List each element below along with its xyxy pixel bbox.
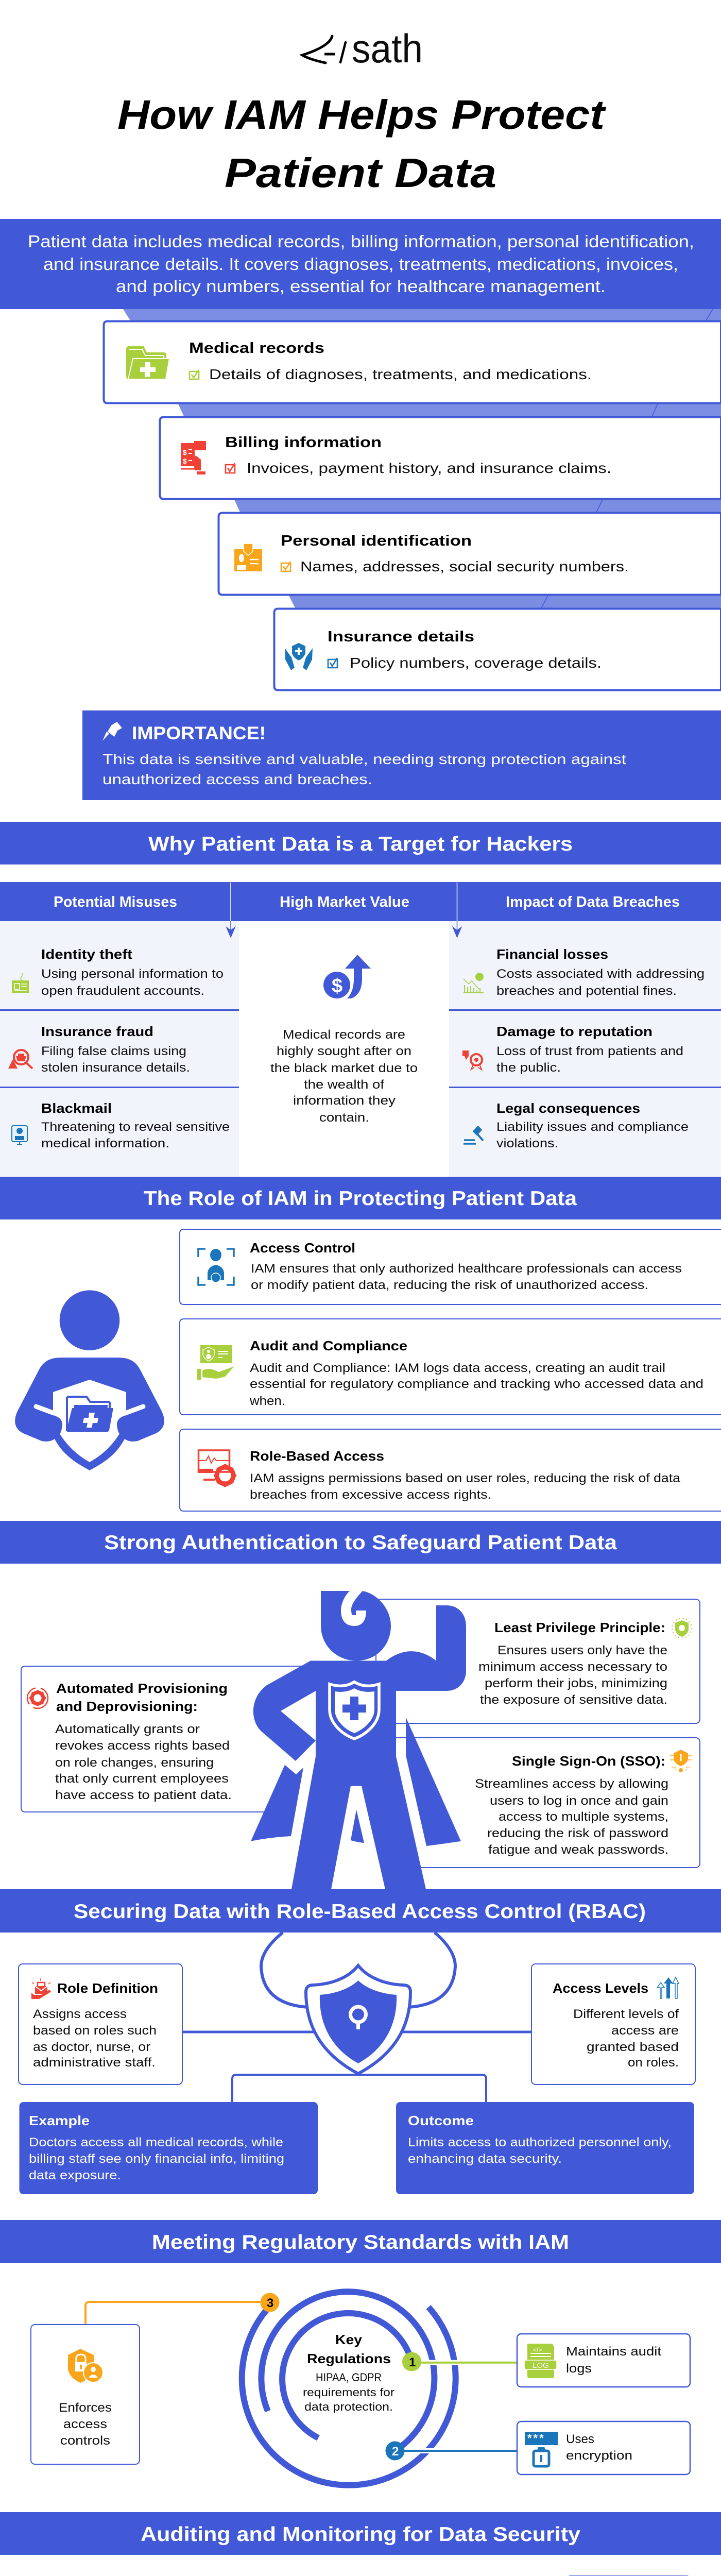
icon: billing invoice hand <box>181 441 206 474</box>
text: audit and compliance <box>249 1338 703 1408</box>
panel: automated provisioning <box>21 1666 314 1812</box>
text: damage to reputation: Damage to reputation <box>496 1024 653 1039</box>
text: automated provisioning <box>55 1681 232 1802</box>
text: access levels: granted based <box>587 2040 679 2054</box>
badge 2 <box>385 2441 405 2461</box>
text: identity theft: Identity theft <box>41 946 132 962</box>
text: automated provisioning: on role changes, ensuring <box>55 1756 214 1770</box>
text: least privilege: Least Privilege Principle: <box>494 1620 665 1635</box>
text: financial losses <box>496 946 705 998</box>
text: single sign-on: access to multiple systems, <box>499 1810 668 1824</box>
icon: orange checkbox <box>281 562 290 571</box>
text: damage to reputation: the public. <box>496 1061 561 1075</box>
heading: RBAC <box>0 1889 721 1933</box>
text: uses encryption: Uses <box>566 2432 594 2446</box>
heading: role of IAM: The Role of IAM in Protecting Patient Data <box>144 1188 577 1210</box>
text: key regulations: Key <box>335 2332 363 2347</box>
icon: rising money value <box>323 955 371 998</box>
connector: blue <box>404 2450 517 2452</box>
badge 1: 1 <box>409 2355 416 2369</box>
icon: password lock <box>525 2432 558 2466</box>
heading: regulatory standards: Meeting Regulatory Standards with IAM <box>152 2231 569 2253</box>
text: key regulations: data protection. <box>304 2400 393 2413</box>
text: access levels <box>553 1980 679 2070</box>
panel: access levels <box>531 1964 695 2084</box>
text: legal consequences <box>496 1100 689 1150</box>
text: key regulations <box>303 2332 394 2413</box>
card title: Insurance details <box>328 629 474 645</box>
text: uses encryption <box>566 2432 632 2463</box>
panel: example <box>20 2102 318 2194</box>
text: least privilege: minimum access necessary to <box>478 1660 667 1674</box>
text: blackmail: Threatening to reveal sensitive <box>41 1120 230 1134</box>
icon: legal gavel <box>464 1125 483 1144</box>
text: enforces access controls: access <box>63 2417 107 2431</box>
text: identity theft: open fraudulent accounts. <box>41 984 204 998</box>
text: blackmail: medical information. <box>41 1137 169 1150</box>
intro band: and policy numbers, essential for healthcare management. <box>116 277 606 296</box>
icon: rising money value: $ <box>332 975 342 997</box>
connector: orange <box>85 2302 270 2325</box>
icon: role hand <box>31 1978 51 1999</box>
heading: RBAC: Securing Data with Role-Based Access Control (RBAC) <box>74 1901 646 1923</box>
text: market value: the wealth of <box>304 1078 384 1092</box>
text: maintains audit logs <box>566 2345 661 2376</box>
heading: auditing and monitoring: Auditing and Monitoring for Data Security <box>141 2523 580 2546</box>
text: financial losses: Costs associated with addressing <box>496 967 705 981</box>
table header: Impact of Data Breaches <box>506 894 680 910</box>
intro band: Patient data includes medical records, billing information, personal identification, <box>28 232 694 251</box>
icon: shield with keyhole <box>306 1965 410 2074</box>
panel: access control <box>180 1229 721 1304</box>
icon: compliance badge in hand <box>197 1345 234 1380</box>
text: automated provisioning: and Deprovisioning: <box>56 1699 198 1714</box>
badge 1 <box>402 2352 421 2371</box>
panel: least privilege <box>376 1599 700 1723</box>
text: access levels: Access Levels <box>553 1980 648 1996</box>
icon: provisioning gear <box>27 1688 48 1708</box>
icon: password lock: *** <box>527 2432 545 2445</box>
text: key regulations: requirements for <box>303 2386 394 2399</box>
diagram: key regulations rings <box>85 2292 517 2485</box>
item text: Details of diagnoses, treatments, and medications. <box>209 366 592 382</box>
text: audit and compliance: essential for regulatory compliance and tracking who accessed data and <box>250 1377 703 1391</box>
panel: role definition <box>19 1964 182 2084</box>
icon: insurance fraud <box>8 1050 32 1069</box>
text: market value: information they <box>293 1094 396 1108</box>
icon: red checkbox <box>226 463 235 473</box>
logo: sath <box>352 26 423 71</box>
callout text: This data is sensitive and valuable, needing strong protection against <box>102 751 626 767</box>
icon: medical folder <box>126 346 169 379</box>
text: access control: or modify patient data, reducing the risk of unauthorized access. <box>251 1278 648 1292</box>
panel: outcome <box>396 2102 694 2194</box>
panel: uses encryption <box>517 2421 690 2475</box>
text: role-based access <box>250 1448 680 1502</box>
panel: billing information <box>160 417 721 499</box>
table header: Potential Misuses <box>54 894 177 910</box>
text: insurance fraud: Insurance fraud <box>41 1024 153 1039</box>
illustration: superhero with shield <box>251 1591 466 1889</box>
text: single sign-on: fatigue and weak passwords. <box>488 1843 668 1857</box>
text: role definition: administrative staff. <box>33 2056 156 2070</box>
text: automated provisioning: that only current employees <box>55 1772 229 1786</box>
icon: lock and user <box>68 2349 103 2383</box>
text: legal consequences: violations. <box>496 1137 558 1150</box>
text: access control: Access Control <box>250 1240 355 1256</box>
callout text <box>102 751 626 787</box>
panel: outcome: enhancing data security. <box>408 2152 562 2166</box>
panel: personal identification <box>218 513 721 595</box>
panel: example: Example <box>29 2113 90 2128</box>
text: single sign-on: reducing the risk of password <box>487 1826 668 1840</box>
text: role definition <box>33 1980 158 2070</box>
panel: audit and compliance <box>180 1319 721 1415</box>
text: uses encryption: encryption <box>566 2449 632 2463</box>
table header: High Market Value <box>280 894 409 910</box>
icon: log file: </> <box>533 2346 542 2353</box>
icon: blackmail <box>12 1126 27 1144</box>
heading: role of IAM <box>0 1177 721 1219</box>
panel: role-based access <box>180 1429 721 1511</box>
icon: pushpin <box>102 722 122 741</box>
heading: regulatory standards <box>0 2220 721 2263</box>
title: How IAM Helps Protect <box>117 92 607 138</box>
text: financial losses: breaches and potential fines. <box>496 984 677 998</box>
card title: Personal identification <box>281 533 472 549</box>
diagram: RBAC connectors and shield <box>182 1933 531 2102</box>
text: identity theft <box>41 946 224 998</box>
icon: access level arrows <box>657 1977 679 1998</box>
text: automated provisioning: Automated Provisioning <box>56 1681 228 1696</box>
icon: billing invoice hand: $ <box>183 457 187 465</box>
heading: strong authentication <box>0 1521 721 1564</box>
text: enforces access controls: controls <box>60 2434 110 2448</box>
arrow: left divider <box>227 921 235 937</box>
text: access control <box>250 1240 682 1292</box>
text: single sign-on: Streamlines access by allowing <box>475 1777 668 1791</box>
item text: Names, addresses, social security numbers. <box>300 558 629 574</box>
heading: strong authentication: Strong Authentication to Safeguard Patient Data <box>104 1532 617 1554</box>
item text: Invoices, payment history, and insurance claims. <box>247 460 611 476</box>
heading: why patient data is a target: Why Patient Data is a Target for Hackers <box>148 833 573 855</box>
panel: insurance details <box>274 609 721 690</box>
text: audit and compliance: when. <box>249 1394 285 1408</box>
text: enforces access controls <box>59 2401 112 2448</box>
heading: why patient data is a target <box>0 822 721 865</box>
logo <box>302 26 423 71</box>
text: least privilege: the exposure of sensitive data. <box>480 1693 667 1707</box>
text: role-based access: breaches from excessive access rights. <box>250 1488 491 1502</box>
icon: single sign-on shield <box>670 1750 692 1772</box>
item text: Policy numbers, coverage details. <box>350 655 602 671</box>
text: single sign-on: users to log in once and gain <box>490 1794 668 1808</box>
text: market value: contain. <box>319 1111 369 1125</box>
ribbon connectors behind cards <box>123 309 721 608</box>
badge 3: 3 <box>267 2296 273 2310</box>
text: automated provisioning: Automatically grants or <box>55 1722 200 1736</box>
connector: green <box>420 2362 517 2364</box>
panel: example: billing staff see only financial info, limiting <box>29 2152 284 2166</box>
text: role-based access: IAM assigns permissions based on user roles, reducing the risk of data <box>250 1471 680 1485</box>
icon: ID badge <box>234 544 262 571</box>
arrow: right divider <box>453 921 461 937</box>
panel: example: Doctors access all medical records, while <box>29 2136 283 2149</box>
panel: example: data exposure. <box>29 2168 121 2182</box>
text: market value <box>270 1028 418 1125</box>
icon: billing invoice hand: $ <box>183 448 187 456</box>
panel: medical records <box>104 321 721 403</box>
panel: outcome: Limits access to authorized personnel only, <box>408 2136 672 2149</box>
heading: auditing and monitoring <box>0 2512 721 2555</box>
title: Patient Data <box>225 150 496 196</box>
panel: single sign-on <box>391 1738 700 1868</box>
intro band: and insurance details. It covers diagnoses, treatments, medications, invoices, <box>43 255 678 274</box>
icon: insured hands shield <box>285 643 313 670</box>
text: access levels: on roles. <box>628 2056 679 2070</box>
text: role definition: as doctor, nurse, or <box>33 2040 150 2054</box>
callout heading: IMPORTANCE! <box>132 723 266 743</box>
text: market value: the black market due to <box>270 1061 418 1075</box>
icon: privilege shield sun <box>672 1618 692 1638</box>
text: single sign-on: Single Sign-On (SSO): <box>512 1753 665 1769</box>
icon: green checkbox <box>190 370 199 379</box>
text: least privilege <box>478 1620 667 1707</box>
icon: monitor with gear <box>198 1450 236 1487</box>
icon: identity theft <box>12 973 29 993</box>
text: key regulations: Regulations <box>307 2351 391 2366</box>
callout text: unauthorized access and breaches. <box>102 771 372 787</box>
callout: importance <box>82 710 721 800</box>
intro band <box>0 219 721 309</box>
illustration: person holding protected folder <box>15 1290 164 1470</box>
icon: verified user <box>198 1249 234 1285</box>
text: automated provisioning: revokes access rights based <box>55 1739 230 1753</box>
text: role definition: Role Definition <box>57 1980 158 1996</box>
text: maintains audit logs: Maintains audit <box>566 2345 661 2359</box>
text: automated provisioning: have access to patient data. <box>55 1788 232 1802</box>
text: financial losses: Financial losses <box>496 946 608 962</box>
title <box>117 92 607 196</box>
text: identity theft: Using personal information to <box>41 967 224 981</box>
chest shield <box>330 1682 379 1739</box>
panel: enforces access controls <box>31 2325 140 2464</box>
badge 2: 2 <box>392 2445 399 2459</box>
icon: financial losses <box>464 973 484 993</box>
text: least privilege: perform their jobs, minimizing <box>485 1676 667 1690</box>
badge 3 <box>261 2293 279 2312</box>
text: audit and compliance: Audit and Compliance: IAM logs data access, creating an audit trail <box>250 1361 665 1375</box>
text: blackmail: Blackmail <box>41 1100 112 1116</box>
text: blackmail <box>41 1100 230 1150</box>
text: role-based access: Role-Based Access <box>250 1448 384 1464</box>
text: market value: highly sought after on <box>277 1044 411 1058</box>
panel: maintains audit logs <box>517 2334 690 2387</box>
icon: damage to reputation <box>462 1050 482 1070</box>
text: insurance fraud <box>41 1024 190 1075</box>
text: role definition: based on roles such <box>33 2024 157 2038</box>
panel: outcome: Outcome <box>408 2113 474 2128</box>
text: legal consequences: Liability issues and compliance <box>496 1120 689 1134</box>
text: access levels: Different levels of <box>573 2007 679 2021</box>
text: role definition: Assigns access <box>33 2007 127 2021</box>
text: damage to reputation <box>496 1024 683 1075</box>
table header <box>0 882 721 921</box>
card title: Medical records <box>189 340 324 357</box>
text: audit and compliance: Audit and Compliance <box>250 1338 407 1353</box>
text: enforces access controls: Enforces <box>59 2401 112 2415</box>
card title: Billing information <box>225 434 382 451</box>
text: key regulations: HIPAA, GDPR <box>316 2371 382 2384</box>
text: access levels: access are <box>611 2024 679 2038</box>
text: insurance fraud: stolen insurance details. <box>41 1061 190 1075</box>
text: single sign-on <box>475 1753 668 1857</box>
text: damage to reputation: Loss of trust from patients and <box>496 1044 683 1058</box>
panel: hacker target table <box>0 882 721 1177</box>
text: insurance fraud: Filing false claims using <box>41 1044 186 1058</box>
text: access control: IAM ensures that only authorized healthcare professionals can access <box>251 1262 682 1276</box>
icon: log file: LOG <box>533 2361 549 2370</box>
icon: blue checkbox <box>328 658 337 668</box>
icon: log file <box>524 2344 557 2378</box>
text: least privilege: Ensures users only have the <box>497 1643 667 1657</box>
text: maintains audit logs: logs <box>566 2362 592 2376</box>
text: legal consequences: Legal consequences <box>496 1100 640 1116</box>
text: market value: Medical records are <box>283 1028 405 1042</box>
